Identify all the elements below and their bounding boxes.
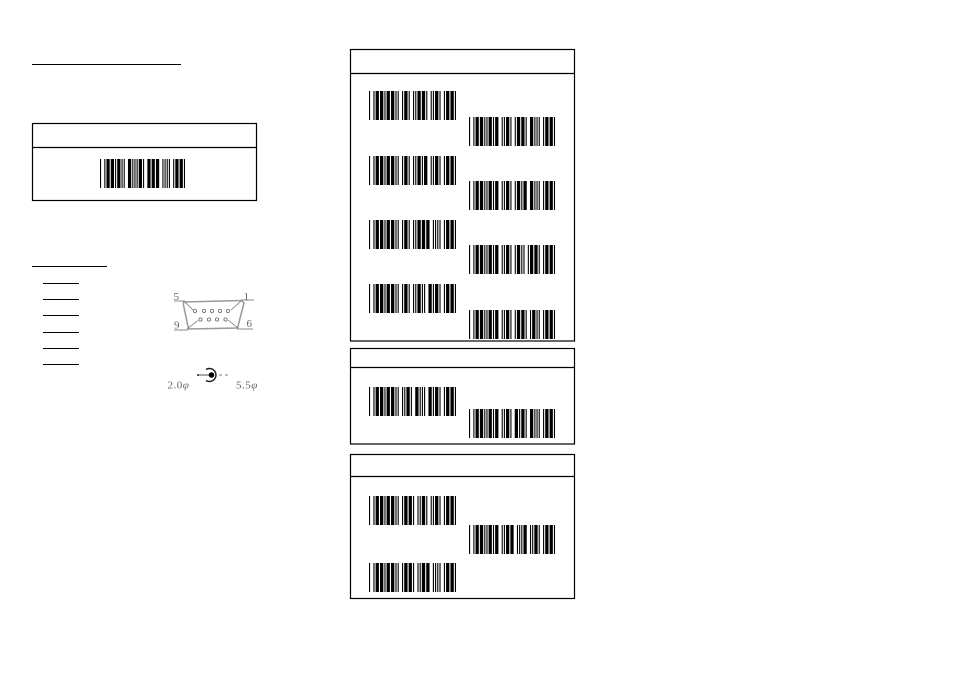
heading rule: section two [32,266,107,267]
barcode: left [369,387,456,416]
barcode: row 3 left [369,220,456,249]
icon: power jack polarity [168,369,258,392]
pin list rules [43,283,79,365]
panel: eight barcodes [350,50,575,341]
icon: 9-pin serial connector: 9 [174,320,180,332]
icon: 9-pin serial connector [174,291,254,332]
icon: power jack polarity: 2.0φ [168,380,189,392]
icon: power jack polarity: 5.5φ [236,380,258,392]
panel: single barcode box [32,124,257,200]
barcode: right [469,409,555,438]
icon: 9-pin serial connector: 6 [246,318,252,330]
barcode: middle right [469,525,555,554]
panel: three barcodes [350,454,575,598]
barcode: box one [100,159,185,188]
heading rule: section one [32,64,181,65]
barcode: top left [369,496,456,525]
barcode: row 4 left [369,284,456,313]
panel: two barcodes [350,348,575,444]
barcode: row 2 left [369,156,456,185]
barcode: row 1 left [369,91,456,120]
barcode: bottom left [369,563,456,592]
barcode: row 4 right [469,310,555,339]
icon: 9-pin serial connector: 5 [174,291,180,303]
barcode: row 3 right [469,245,555,274]
barcode: row 2 right [469,181,555,210]
icon: 9-pin serial connector: 1 [244,291,249,303]
barcode: row 1 right [469,117,555,146]
